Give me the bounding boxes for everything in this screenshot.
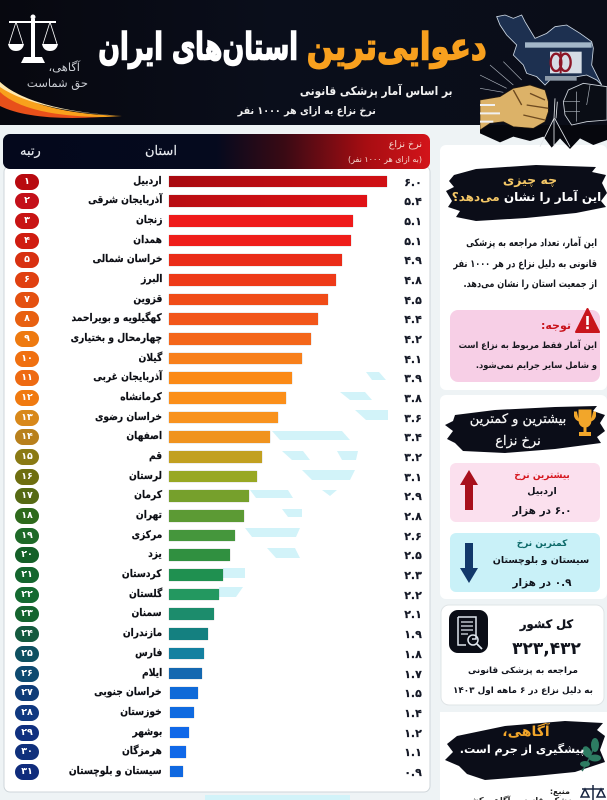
row 7: ۷: [24, 294, 30, 305]
heading line 2: این آمار را نشان می‌دهد؟: [452, 190, 601, 204]
row 16: [15, 469, 422, 485]
row 1: اردبیل: [134, 175, 162, 187]
heading text: نرخ نزاع: [495, 434, 541, 449]
column: province: استان: [145, 144, 177, 159]
row 24: ۱.۹: [404, 628, 422, 641]
row 10: ۱۰: [21, 353, 33, 364]
row 16: ۱۶: [21, 471, 33, 482]
row 19: [15, 528, 422, 544]
row 18: تهران: [136, 509, 162, 521]
row 28: ۲۸: [21, 707, 33, 718]
row 7: قزوین: [133, 293, 162, 305]
row 15: ۳.۲: [404, 451, 422, 464]
note text: این آمار فقط مربوط به نزاع است: [459, 341, 597, 351]
row 21: ۲۱: [21, 569, 33, 580]
row 15: [15, 449, 422, 465]
row 2: ۲: [24, 195, 30, 206]
heading text: بیشترین و کمترین: [470, 412, 566, 427]
bar chart: [15, 174, 422, 780]
heading line 1: چه چیزی: [503, 172, 557, 187]
row 5: [15, 252, 422, 268]
note text: [456, 336, 597, 376]
row 22: گلستان: [129, 588, 162, 600]
explanation text: قانونی به دلیل نزاع در هر ۱۰۰۰ نفر: [453, 258, 597, 270]
row 11: آذربایجان غربی: [93, 371, 162, 383]
row 1: [15, 174, 422, 190]
note box: [450, 310, 600, 382]
icon: up arrow: [459, 469, 479, 511]
row 22: ۲.۲: [404, 589, 422, 602]
icon: leaves: [580, 737, 602, 773]
row 12: کرمانشاه: [120, 391, 162, 403]
row 13: ۱۳: [21, 412, 33, 423]
title: highlighted part: دعوایی‌ترین: [307, 26, 487, 69]
row 2: ۵.۴: [404, 195, 422, 208]
row 25: فارس: [135, 647, 162, 659]
row 7: ۴.۵: [404, 294, 422, 307]
row 4: ۵.۱: [404, 235, 422, 248]
row 30: [15, 744, 422, 760]
row 16: ۳.۱: [404, 471, 422, 484]
column: rate: نرخ نزاع: [389, 139, 422, 150]
row 17: ۲.۹: [404, 490, 422, 503]
panel: what the statistic shows: [446, 165, 607, 382]
row 11: ۳.۹: [404, 372, 422, 385]
total description: مراجعه به پزشکی قانونی: [468, 666, 578, 676]
row 28: ۱.۴: [404, 707, 422, 720]
total label: کل کشور: [520, 617, 573, 631]
row 3: ۵.۱: [404, 215, 422, 228]
source label: منبع:: [550, 787, 570, 796]
row 8: [15, 311, 422, 327]
row 2: آذربایجان شرقی: [88, 194, 162, 206]
row 10: ۴.۱: [404, 353, 422, 366]
icon: scales of justice logo: [8, 14, 58, 63]
row 9: ۴.۲: [404, 333, 422, 346]
row 21: [15, 567, 422, 583]
row 5: ۵: [24, 254, 30, 265]
row 23: سمنان: [132, 607, 162, 619]
row 14: ۱۴: [21, 431, 33, 442]
column: rate: (به ازای هر ۱۰۰۰ نفر): [348, 155, 422, 164]
row 28: خوزستان: [120, 706, 162, 718]
brush background: [445, 720, 605, 780]
row 6: البرز: [141, 273, 162, 285]
note title: توجه:: [541, 319, 571, 332]
row 29: ۲۹: [21, 726, 33, 738]
row 20: ۲۰: [21, 549, 33, 560]
total description: [445, 662, 601, 701]
row 5: خراسان شمالی: [92, 253, 162, 265]
row 18: ۱۸: [21, 510, 33, 521]
row 8: کهگیلویه و بویراحمد: [72, 312, 162, 324]
row 28: [15, 705, 422, 721]
row 11: [15, 370, 422, 386]
row 25: ۲۵: [21, 648, 33, 659]
row 24: مازندران: [123, 627, 162, 639]
row 9: ۹: [24, 333, 30, 344]
icon: down arrow: [459, 542, 479, 584]
row 27: [15, 685, 422, 701]
row 9: [15, 331, 422, 347]
row 4: همدان: [133, 234, 162, 246]
panel: highest and lowest: [440, 395, 607, 599]
row 30: هرمزگان: [122, 745, 162, 757]
row 26: ایلام: [142, 666, 162, 678]
lowest label: کمترین نرخ: [517, 539, 567, 549]
row 21: کردستان: [122, 568, 162, 580]
row 29: بوشهر: [132, 726, 162, 738]
row 8: ۸: [24, 313, 30, 324]
row 26: ۲۶: [21, 668, 33, 678]
row 3: زنجان: [135, 214, 162, 226]
row 15: ۱۵: [21, 451, 33, 462]
row 27: ۲۷: [21, 687, 33, 698]
row 14: ۳.۴: [404, 431, 422, 444]
icon: Iran map and fists: [480, 14, 607, 149]
row 24: ۲۴: [21, 628, 33, 639]
brush heading background: [446, 165, 607, 221]
row 13: [15, 410, 422, 426]
row 29: ۱.۲: [404, 726, 422, 740]
row 1: ۱: [24, 176, 30, 187]
total description: به دلیل نزاع در ۶ ماهه اول ۱۴۰۳: [453, 686, 593, 696]
column: rank: رتبه: [20, 144, 41, 159]
row 1: ۶.۰: [404, 176, 422, 189]
explanation text: از جمعیت استان را نشان می‌دهد.: [463, 279, 597, 290]
row 12: [15, 390, 422, 406]
row 20: [15, 547, 422, 563]
explanation text: این آمار، تعداد مراجعه به پزشکی: [466, 238, 597, 249]
row 13: ۳.۶: [404, 412, 422, 425]
row 5: ۴.۹: [404, 254, 422, 267]
row 25: [15, 646, 422, 662]
row 23: ۲۳: [21, 608, 33, 619]
row 3: ۳: [24, 215, 30, 226]
row 18: [15, 508, 422, 524]
lowest value: ۰.۹ در هزار: [512, 577, 572, 589]
row 22: [15, 587, 422, 603]
row 24: [15, 626, 422, 642]
table header: [3, 134, 430, 169]
row 17: کرمان: [134, 489, 162, 501]
highest value: ۶.۰ در هزار: [512, 505, 572, 517]
brush heading background: [445, 405, 605, 453]
highest box: [450, 463, 600, 522]
total number: ۳۲۳,۴۳۲: [512, 639, 581, 659]
row 13: خراسان رضوی: [95, 411, 162, 423]
row 23: [15, 606, 422, 622]
icon: warning triangle: [575, 307, 600, 334]
row 23: ۲.۱: [404, 608, 422, 621]
note text: و شامل سایر جرایم نمی‌شود.: [476, 361, 597, 371]
row 2: [15, 192, 422, 209]
row 19: ۱۹: [21, 530, 33, 541]
row 22: ۲۲: [21, 589, 33, 600]
subtitle: بر اساس آمار پزشکی قانونی: [300, 84, 453, 98]
row 7: [15, 292, 422, 308]
row 6: [15, 272, 422, 288]
row 26: ۱.۷: [404, 668, 422, 680]
row 19: مرکزی: [131, 529, 162, 541]
panel: awareness banner: [440, 715, 607, 800]
lowest box: [450, 533, 600, 592]
row 12: ۳.۸: [404, 392, 422, 405]
subtitle rate line: نرخ نزاع به ازای هر ۱۰۰۰ نفر: [238, 105, 376, 117]
icon: small scales: [580, 785, 607, 800]
row 19: ۲.۶: [404, 530, 422, 543]
row 27: ۱.۵: [404, 687, 422, 700]
row 17: ۱۷: [21, 490, 33, 501]
row 12: ۱۲: [21, 392, 33, 403]
column: rate: [348, 139, 422, 164]
row 4: [15, 233, 422, 249]
row 10: [15, 351, 422, 367]
row 31: ۳۱: [21, 766, 33, 777]
row 14: [15, 429, 422, 445]
row 31: سیستان و بلوچستان: [69, 765, 162, 777]
row 6: ۶: [24, 274, 30, 285]
row 30: ۳۰: [21, 746, 33, 757]
highest province: اردبیل: [527, 486, 557, 497]
heading text: [448, 409, 588, 453]
lowest province: سیستان و بلوچستان: [493, 555, 589, 566]
row 14: اصفهان: [126, 430, 162, 442]
row 20: ۲.۵: [404, 549, 422, 562]
row 29: [15, 725, 422, 741]
orange swoosh: [0, 82, 122, 118]
header banner: [0, 0, 607, 125]
row 30: ۱.۱: [404, 746, 422, 759]
icon: document with magnifier: [449, 610, 488, 653]
row 6: ۴.۸: [404, 274, 422, 287]
row 10: گیلان: [138, 352, 162, 364]
row 8: ۴.۴: [404, 313, 422, 326]
explanation text: [453, 236, 597, 290]
row 31: ۰.۹: [404, 766, 422, 779]
row 11: ۱۱: [21, 372, 33, 383]
row 25: ۱.۸: [404, 648, 422, 661]
title: white part: استان‌های ایران: [98, 26, 298, 69]
row 27: خراسان جنوبی: [94, 686, 162, 698]
row 26: [15, 666, 422, 682]
row 9: چهارمحال و بختیاری: [71, 332, 162, 344]
slogan: پیشگیری از جرم است.: [460, 743, 584, 756]
row 21: ۲.۳: [404, 569, 422, 582]
row 31: [15, 764, 422, 780]
highest label: بیشترین نرخ: [514, 471, 570, 481]
row 18: ۲.۸: [404, 510, 422, 523]
logo text line 2: حق شماست: [27, 76, 88, 90]
row 3: [15, 213, 422, 229]
icon: trophy: [574, 409, 596, 439]
row 17: [15, 488, 422, 504]
row 20: یزد: [148, 548, 162, 560]
logo text line 1: آگاهی،: [48, 60, 80, 74]
heading: آگاهی،: [502, 724, 550, 740]
panel: national total: [441, 605, 604, 705]
row 4: ۴: [24, 235, 30, 246]
row 16: لرستان: [129, 470, 162, 482]
row 15: قم: [149, 450, 162, 462]
